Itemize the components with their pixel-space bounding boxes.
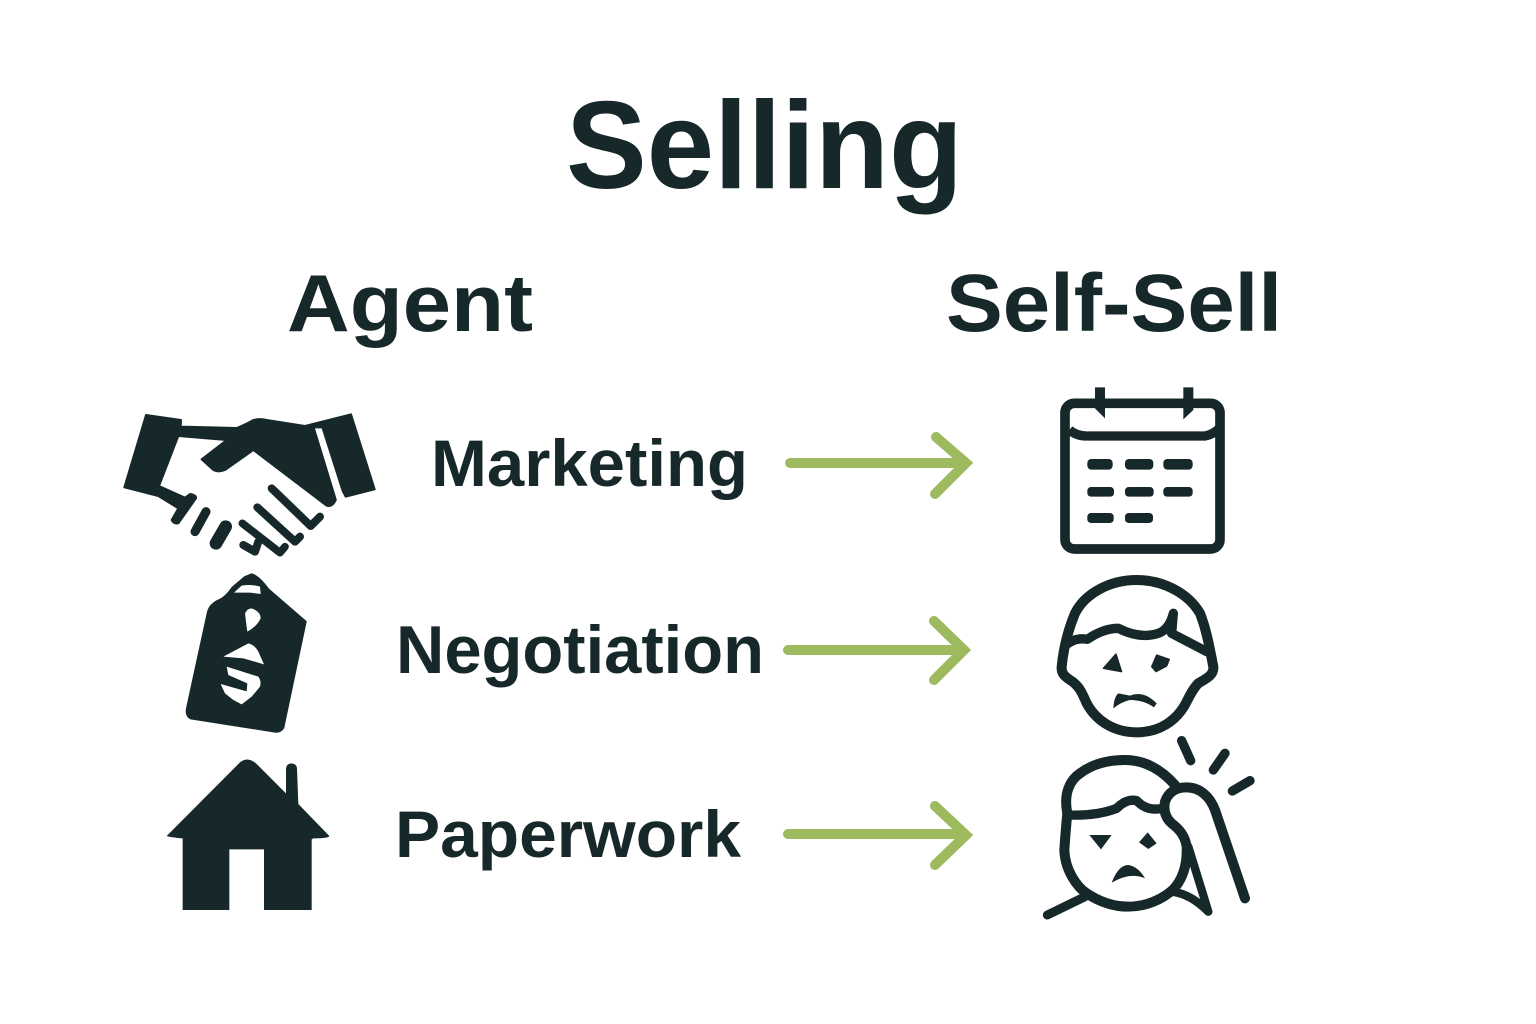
- icon: calendar: [1065, 387, 1220, 549]
- arrow: Paperwork to stressed person: [788, 806, 966, 865]
- icon: handshake: [124, 414, 375, 553]
- label: Paperwork: Paperwork: [395, 797, 741, 871]
- icon: stressed person holding head: [1047, 741, 1250, 915]
- label: Negotiation: Negotiation: [396, 612, 764, 688]
- label: Marketing: Marketing: [431, 426, 748, 500]
- arrow: Negotiation to sad face: [788, 621, 964, 680]
- heading: Self-Sell: Self-Sell: [946, 258, 1282, 349]
- icon: house: [167, 759, 329, 910]
- icon: price tag with dollar sign: [187, 574, 306, 732]
- title: Selling: [566, 77, 963, 215]
- heading: Agent: Agent: [287, 259, 533, 349]
- icon: sad face: [1062, 580, 1213, 732]
- arrow: Marketing to calendar: [790, 437, 966, 494]
